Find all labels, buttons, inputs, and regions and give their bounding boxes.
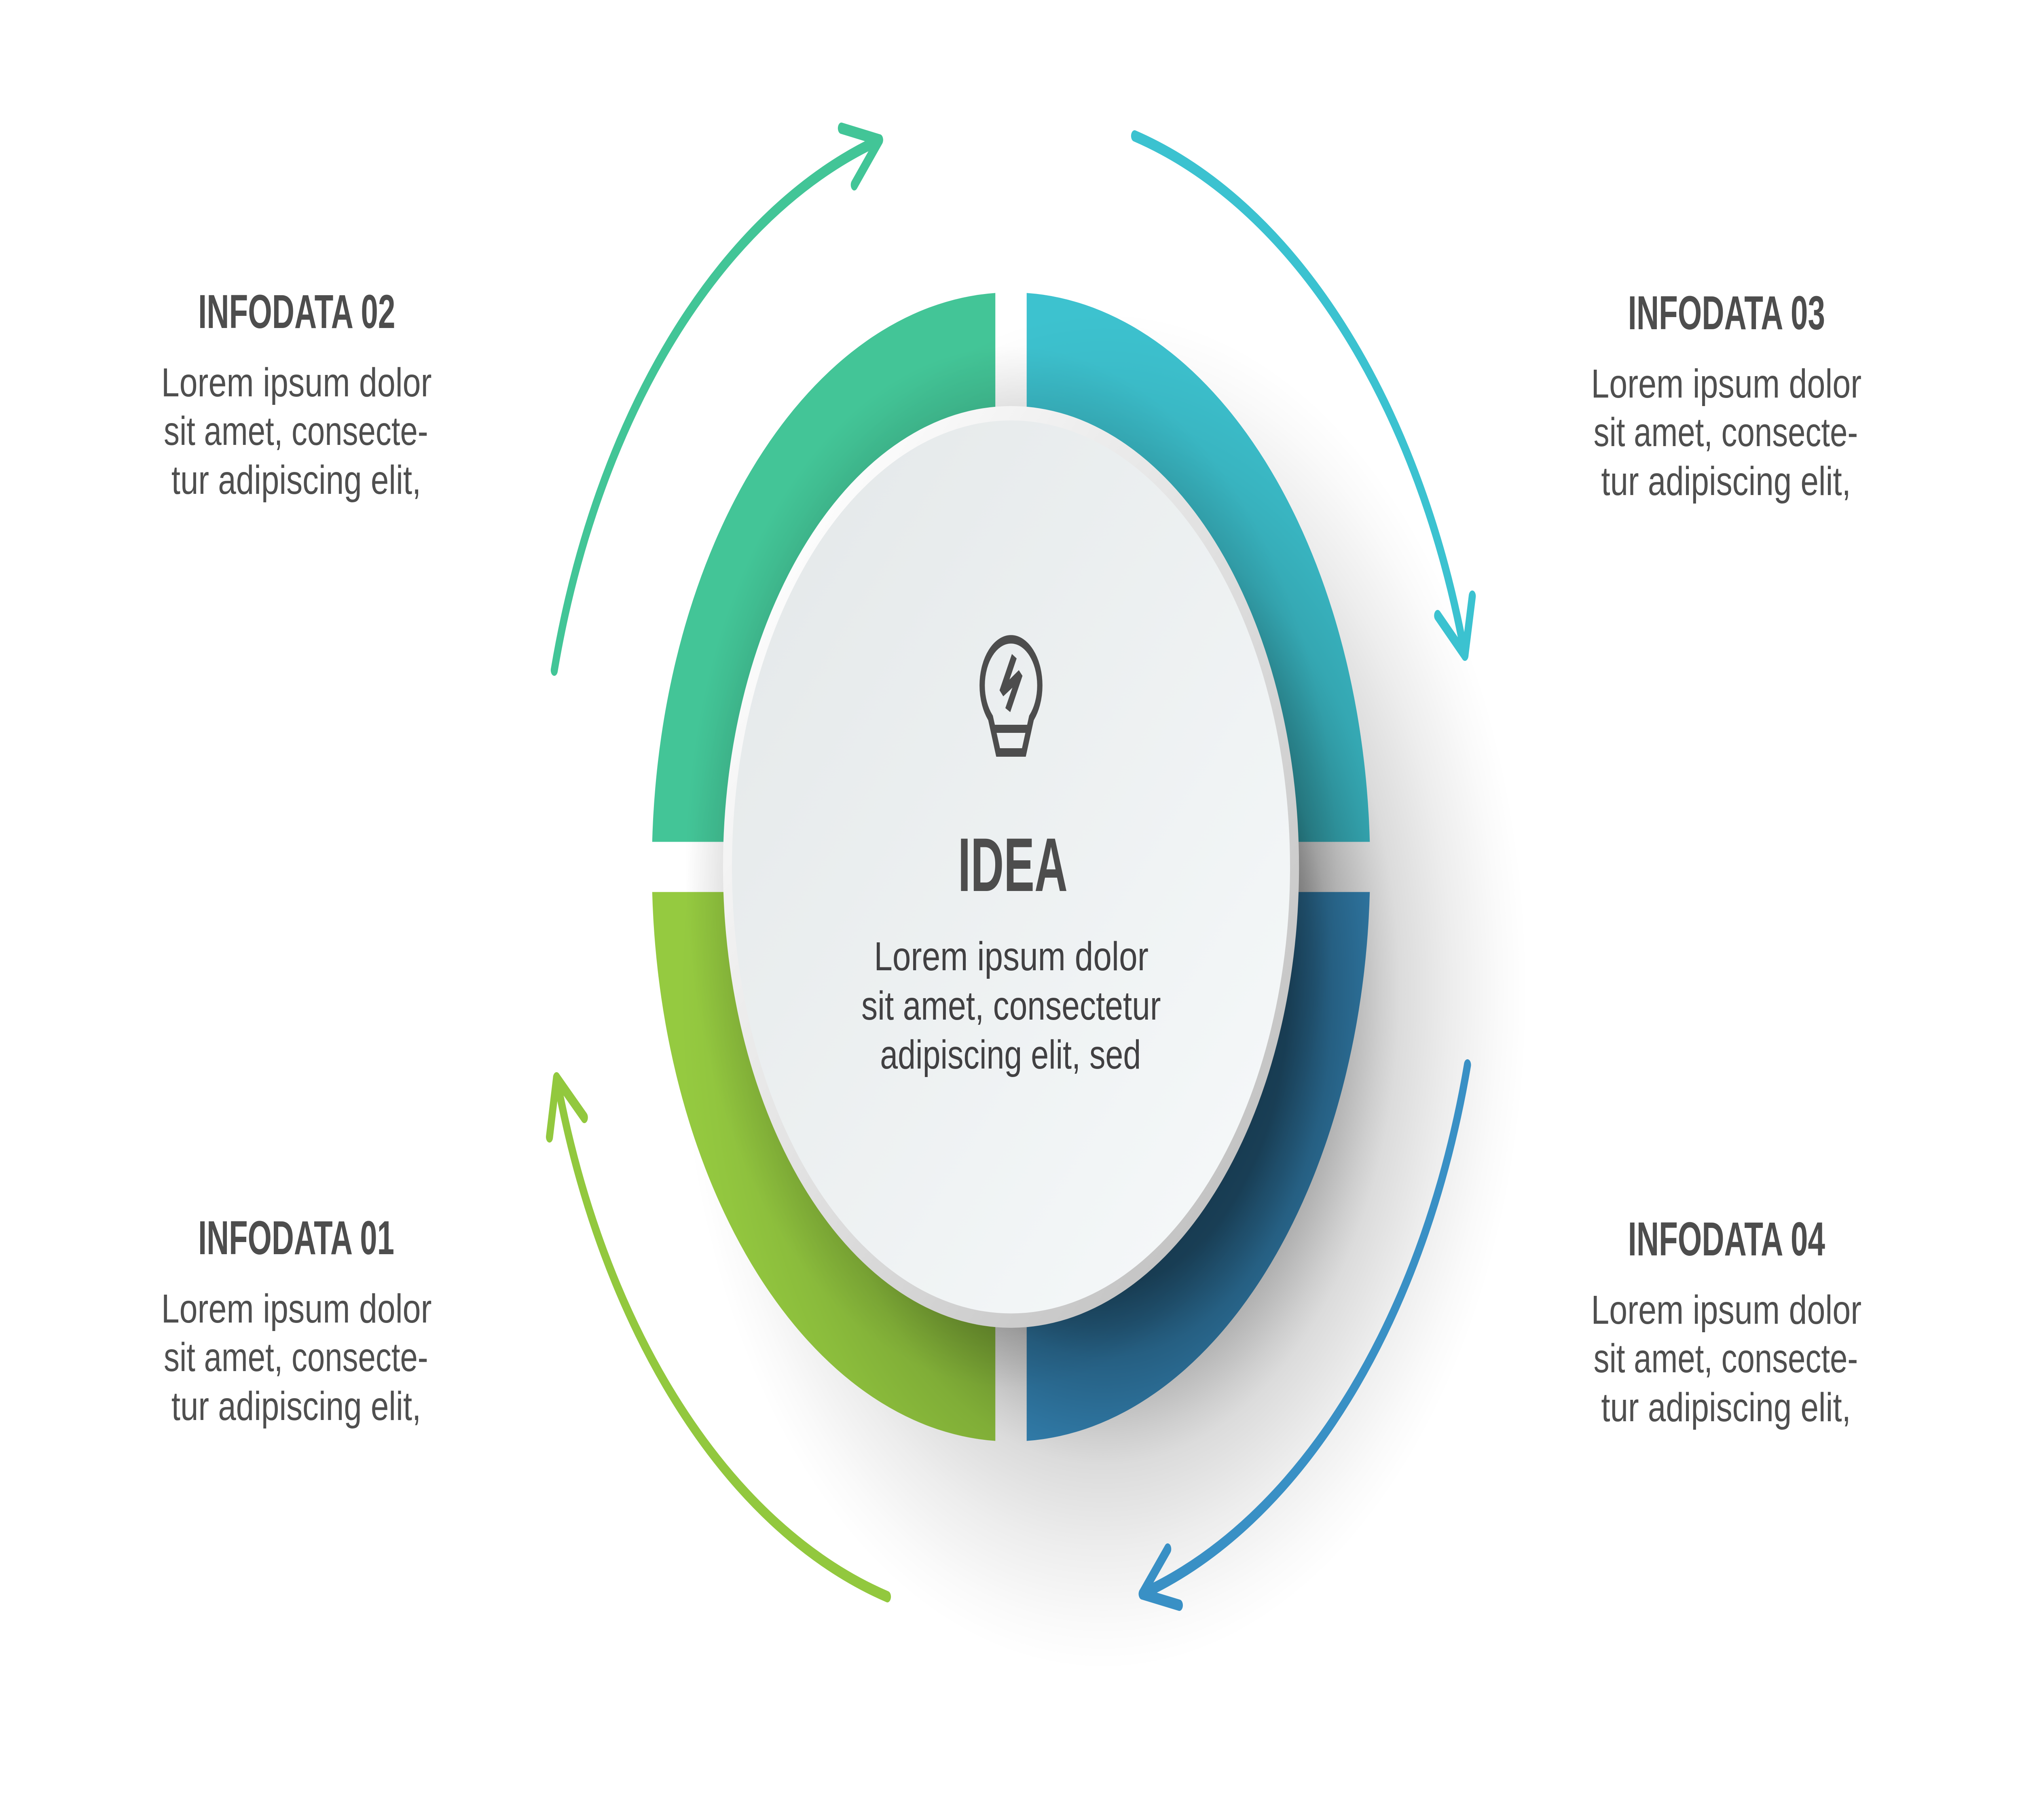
circle rim [723, 406, 1299, 1328]
center title: IDEA [958, 823, 1068, 908]
arrow: lime [550, 1078, 887, 1597]
body: sit amet, consecte- [1594, 410, 1858, 455]
arrow: green [554, 128, 880, 670]
segment: green top-left [652, 293, 995, 842]
body: sit amet, consecte- [164, 408, 428, 454]
body: Lorem ipsum dolor [1591, 361, 1861, 406]
body [161, 1286, 432, 1429]
text block: infodata 03 [1591, 286, 1861, 504]
segment: blue bottom-right [1027, 892, 1370, 1441]
body [161, 360, 432, 503]
icon: light bulb [982, 639, 1040, 752]
body: Lorem ipsum dolor [161, 360, 432, 405]
body: Lorem ipsum dolor [161, 1286, 432, 1331]
center text: sit amet, consectetur [861, 983, 1161, 1029]
body: tur adipiscing elit, [171, 1384, 421, 1429]
center text: Lorem ipsum dolor [874, 934, 1148, 979]
body: tur adipiscing elit, [1601, 1385, 1851, 1430]
body [1591, 1287, 1861, 1430]
central circle [723, 406, 1299, 1328]
body: tur adipiscing elit, [1601, 459, 1851, 504]
segment: lime bottom-left [652, 892, 995, 1441]
body: Lorem ipsum dolor [1591, 1287, 1861, 1333]
body [1591, 361, 1861, 504]
heading: INFODATA 04 [1628, 1212, 1825, 1266]
center text [861, 934, 1161, 1077]
arrow: teal [1135, 136, 1472, 655]
text block: infodata 04 [1591, 1212, 1861, 1430]
text block: infodata 01 [161, 1211, 432, 1429]
body: sit amet, consecte- [164, 1335, 428, 1380]
ring with four segments and shadow [652, 283, 1542, 1699]
text block: infodata 02 [161, 285, 432, 503]
drop shadow [657, 283, 1542, 1699]
arrow: blue [1142, 1065, 1468, 1605]
heading: INFODATA 02 [198, 285, 396, 338]
heading: INFODATA 03 [1628, 286, 1825, 339]
segment: teal top-right [1027, 293, 1370, 842]
body: sit amet, consecte- [1594, 1336, 1858, 1381]
body: tur adipiscing elit, [171, 457, 421, 503]
center text: adipiscing elit, sed [880, 1032, 1141, 1077]
circle face [732, 421, 1290, 1314]
heading: INFODATA 01 [198, 1211, 394, 1264]
contact shadow [685, 345, 1337, 1389]
